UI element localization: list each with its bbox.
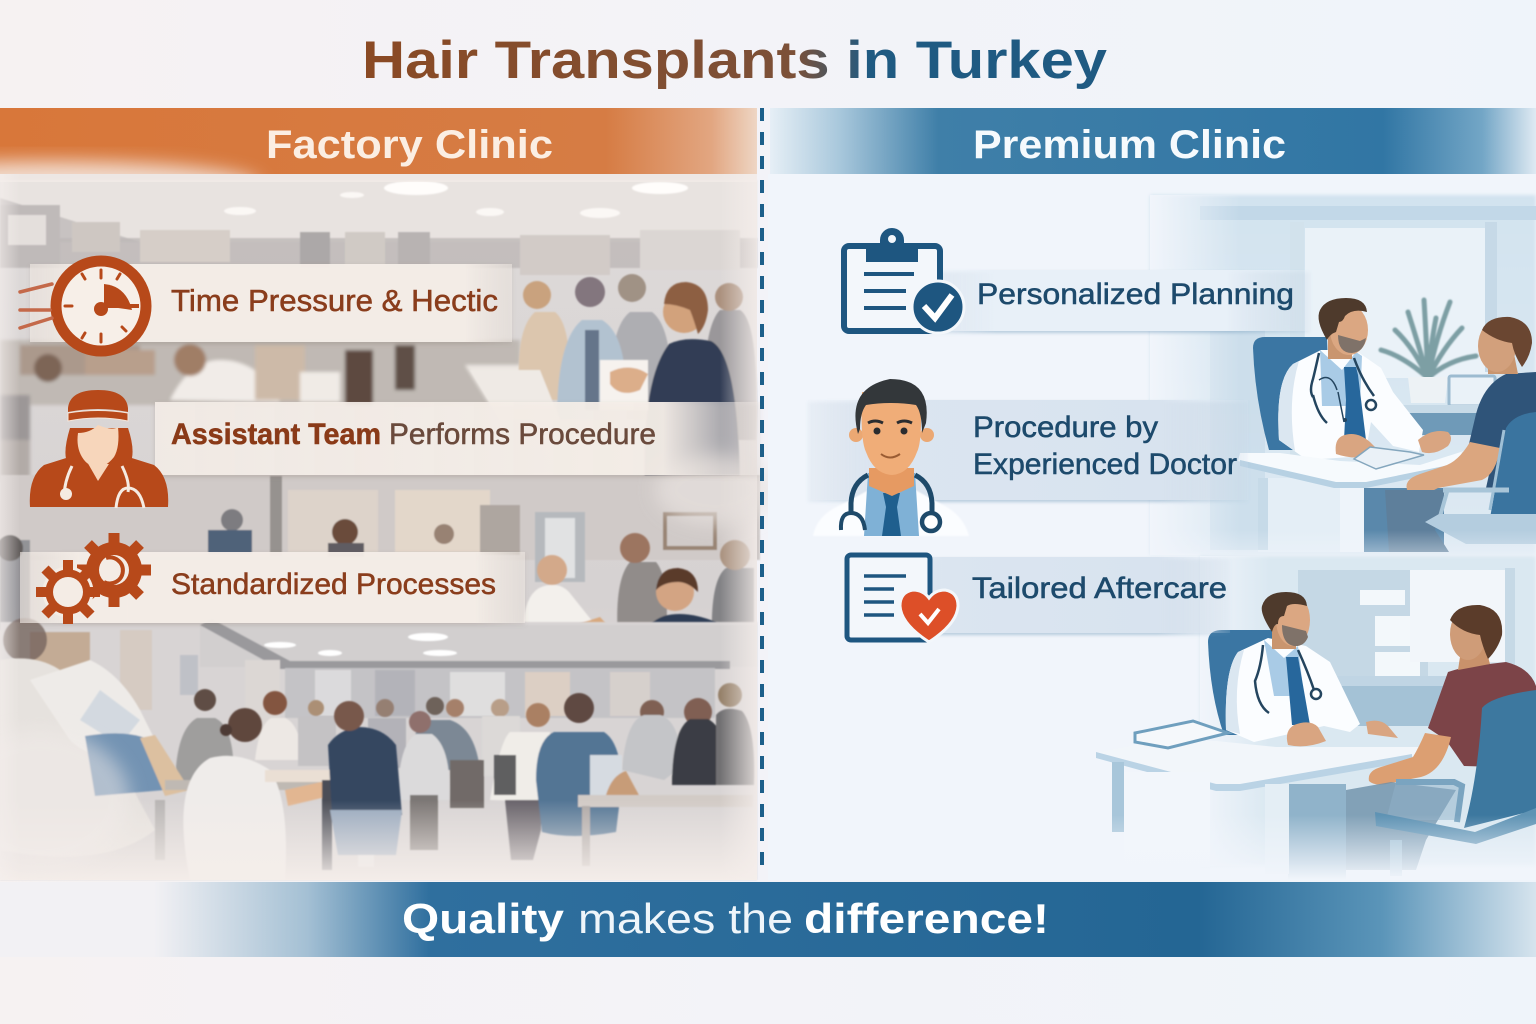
plant [1381, 300, 1476, 403]
patient [1346, 605, 1536, 870]
icon: doctor portrait [813, 379, 969, 536]
doctor chair [1253, 337, 1331, 450]
desk top and papers [1238, 447, 1464, 488]
icon: clock with speed lines [20, 261, 146, 351]
panel: factory clinic scene [0, 174, 775, 880]
doctor [1278, 298, 1451, 460]
middle room: windows, frames and distant staff [0, 475, 760, 630]
lower room: open floor full of staff and patients [0, 618, 757, 880]
icon: gears [36, 533, 151, 624]
factory item: standardized processes: Standardized Processes [171, 568, 496, 601]
premium item: experienced doctor [808, 379, 1248, 536]
upper room: ceiling, lights and walls [0, 180, 757, 275]
premium clinic header: Premium Clinic [973, 123, 1286, 167]
desk [1096, 741, 1426, 880]
premium item: tailored aftercare: Tailored Aftercare [972, 572, 1227, 605]
premium item: personalized planning [844, 228, 1310, 333]
bottom slogan banner [0, 882, 1536, 957]
factory clinic header: Factory Clinic [266, 123, 553, 167]
large gear [77, 533, 151, 607]
background staff group [175, 683, 754, 850]
premium item: tailored aftercare [847, 555, 1230, 642]
bottom slogan banner: difference! [804, 895, 1049, 942]
foreground staff and patients [0, 658, 753, 880]
monitor and back shelf [1392, 376, 1502, 435]
desk [1258, 478, 1444, 552]
notebook [1135, 721, 1228, 748]
panel: premium clinic background [768, 174, 1536, 880]
factory item: assistant team: Performs Procedure [389, 418, 656, 451]
doctor [1226, 592, 1398, 746]
premium item: experienced doctor: Experienced Doctor [973, 448, 1237, 481]
title: Hair Transplants in Turkey [362, 31, 1108, 90]
bottom slogan banner: Quality [402, 895, 565, 942]
blurred crowd band between first two rows [0, 340, 550, 480]
factory item: assistant team [30, 390, 760, 508]
factory item: time pressure [20, 261, 512, 351]
premium clinic header [770, 108, 1536, 174]
bottom slogan banner: makes the [578, 895, 793, 942]
factory clinic header [0, 108, 757, 174]
factory item: standardized processes [20, 533, 525, 624]
icon: document with heart [847, 555, 958, 642]
center dashed divider [760, 108, 764, 876]
patient chair [1425, 412, 1536, 544]
doctor chair [1208, 630, 1274, 735]
icon: clipboard with check [844, 228, 964, 333]
patient [1385, 317, 1536, 552]
consultation room one: doctor and patient [1150, 195, 1536, 558]
consultation room two: doctor and patient [1090, 556, 1536, 880]
premium item: experienced doctor: Procedure by [973, 411, 1158, 444]
icon: nurse [30, 390, 168, 508]
factory item: time pressure: Time Pressure & Hectic [171, 283, 498, 318]
small gear [36, 560, 100, 624]
patient chair [1375, 690, 1536, 876]
middle right staff group [524, 533, 754, 668]
upper right crowd [470, 274, 757, 490]
premium item: personalized planning: Personalized Planning [977, 278, 1294, 311]
mist over the edges of the scene [0, 174, 775, 880]
factory item: assistant team: Assistant Team [171, 418, 381, 451]
